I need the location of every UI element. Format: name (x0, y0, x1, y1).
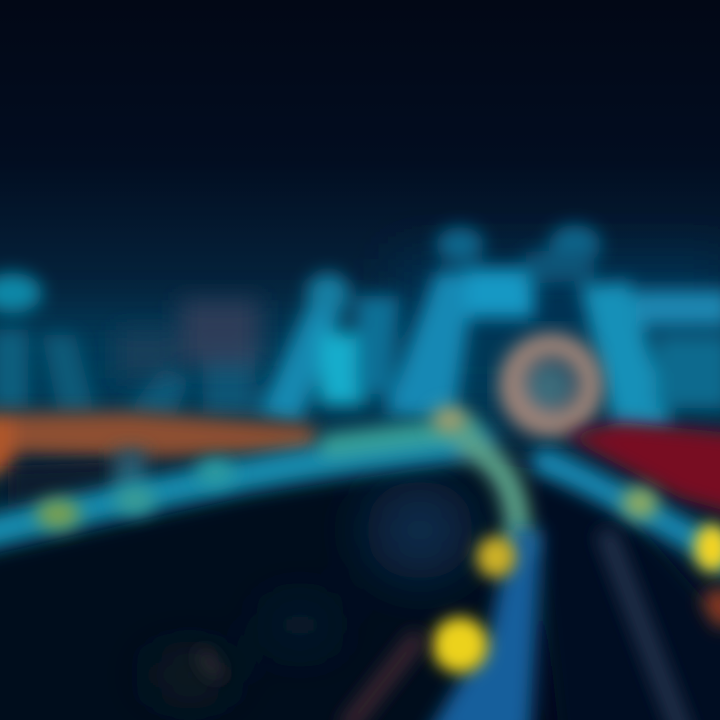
bridge towers: cyan glow (0, 225, 720, 434)
yellow lamps (432, 524, 720, 673)
dark area below railing (8, 450, 146, 512)
ring ornament (511, 345, 591, 425)
red roof on the right (565, 422, 720, 515)
skyline haze (0, 260, 720, 420)
road surface (0, 460, 720, 720)
orange left railing (0, 412, 315, 474)
teal main curve of the bridge deck (0, 428, 720, 564)
blue vertical road strip (424, 530, 542, 720)
teal lights along the deck (36, 406, 658, 529)
road glow patches (145, 480, 475, 695)
lower right streaks and dim reflections (205, 530, 720, 720)
muted brown patches in skyline (116, 300, 260, 378)
